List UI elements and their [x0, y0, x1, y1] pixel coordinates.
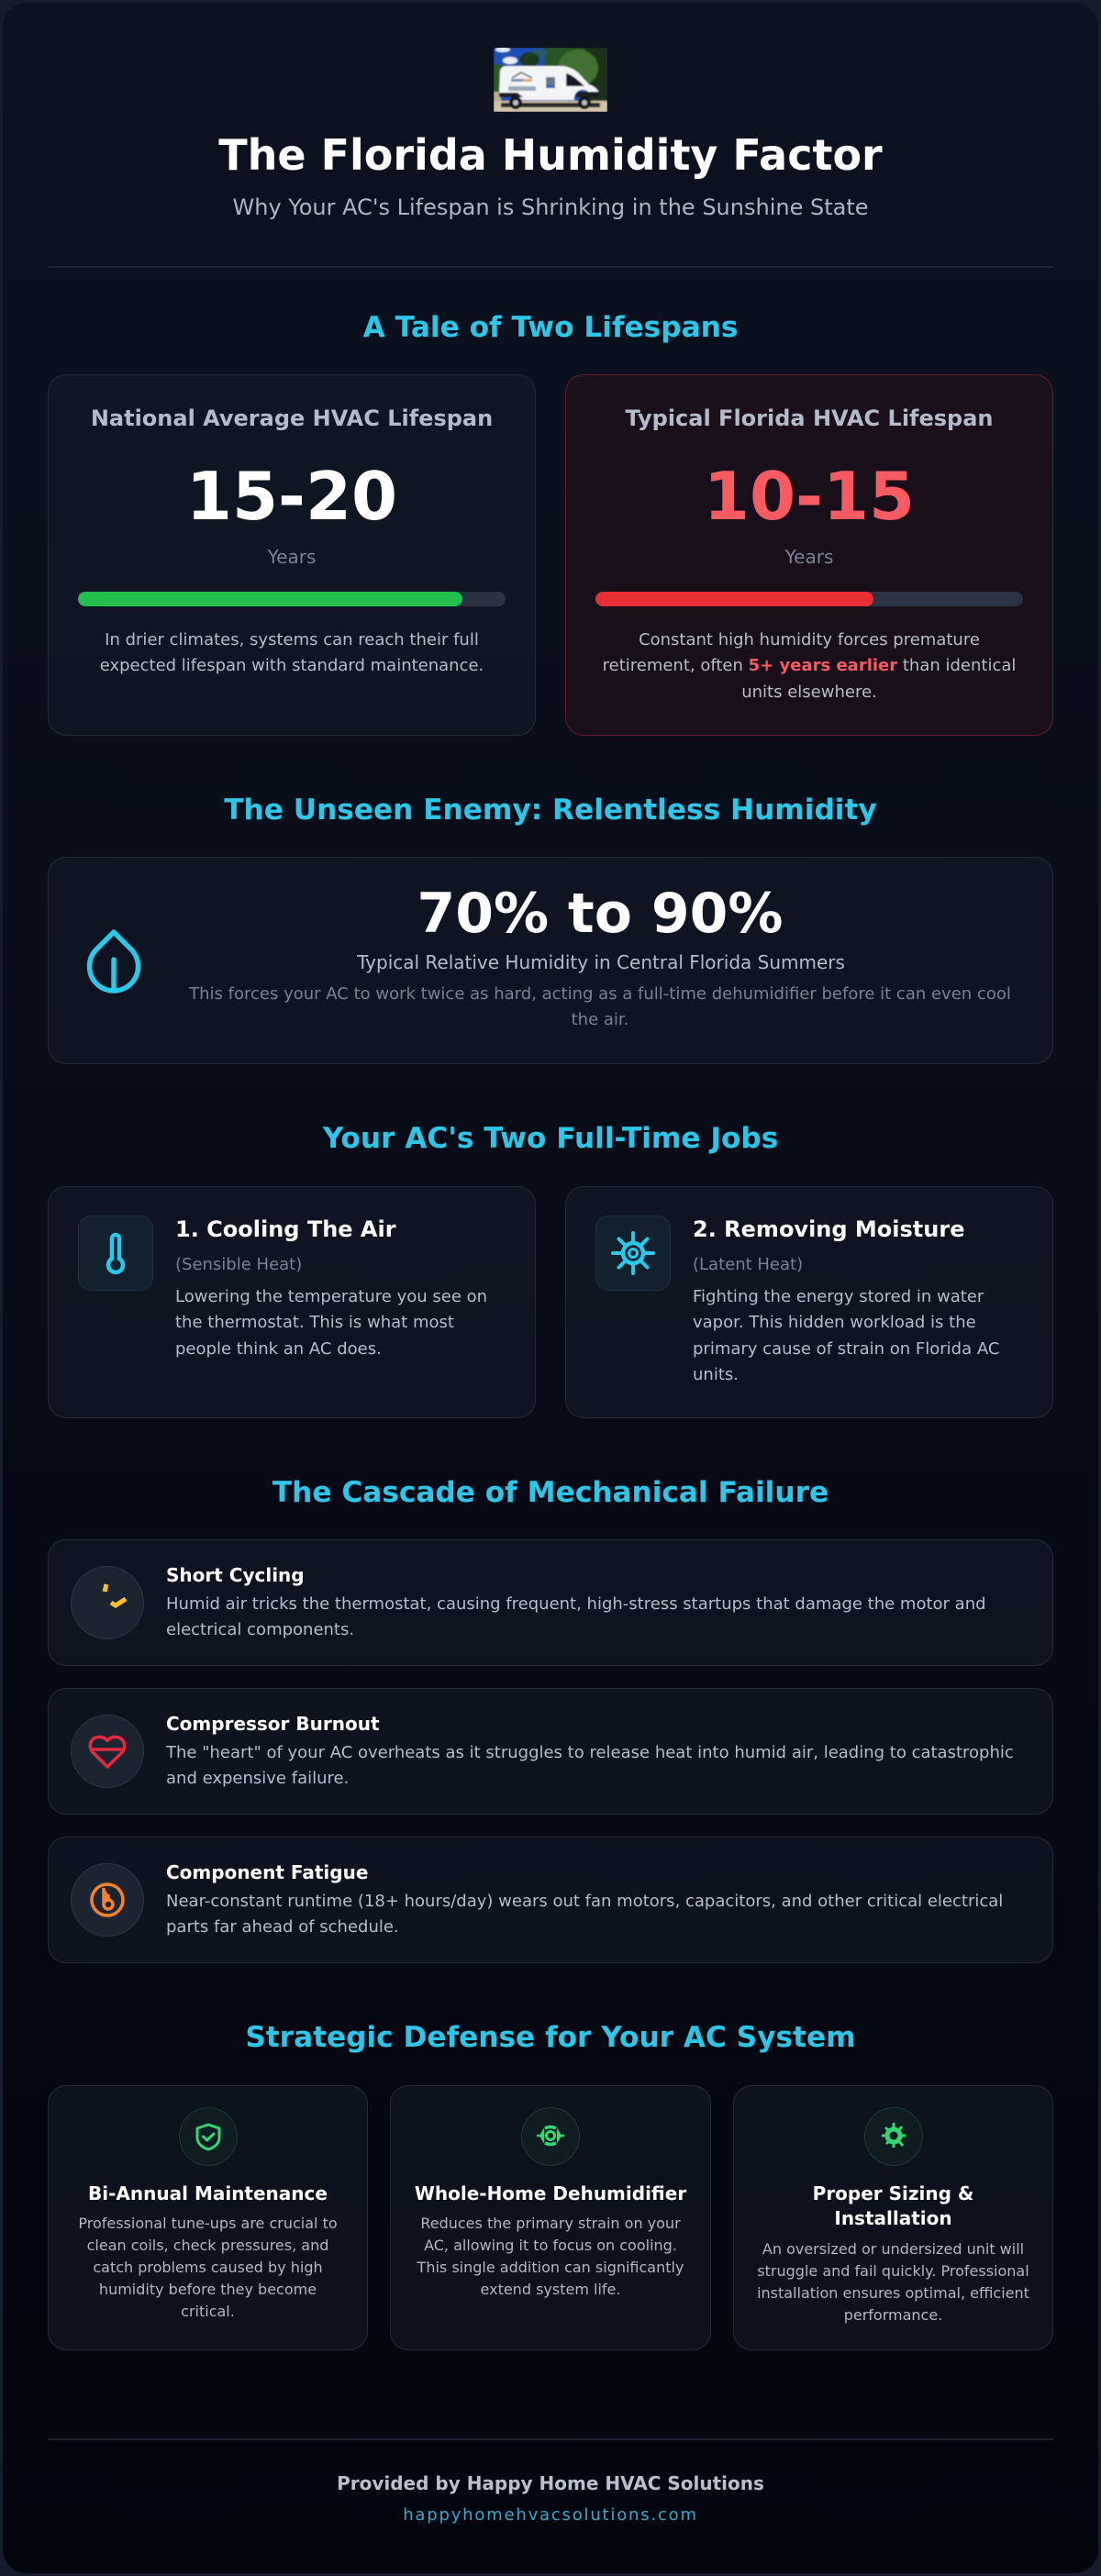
panel: humidity [48, 857, 1053, 1064]
section: Strategic Defense [48, 2021, 1053, 2350]
stat: 15-20: 15-20 [186, 458, 397, 535]
card title: Installation [834, 2207, 952, 2229]
description: primary cause of strain on Florida AC [693, 1339, 999, 1359]
provider credit: Provided by Happy Home HVAC Solutions [337, 2472, 764, 2494]
description [189, 984, 1011, 1029]
description: This forces your AC to work twice as hard, acting as a full-time dehumidifier before it can even cool [189, 984, 1011, 1004]
job subtitle: (Sensible Heat) [175, 1255, 302, 1274]
description: AC, allowing it to focus on cooling. [424, 2237, 677, 2254]
description: catch problems caused by high [93, 2259, 323, 2276]
heading: Your AC's Two Full-Time Jobs [323, 1122, 778, 1155]
description: the thermostat. This is what most [175, 1313, 454, 1332]
icon: thermometer [78, 1216, 153, 1291]
description: and expensive failure. [166, 1769, 349, 1788]
description: retirement, often 5+ years earlier than identical [603, 656, 1016, 675]
card title: Whole-Home Dehumidifier [415, 2182, 686, 2204]
item title: Component Fatigue [166, 1861, 368, 1883]
description: Humid air tricks the thermostat, causing frequent, high-stress startups that damage the motor and [166, 1594, 986, 1614]
panel heading: National Average HVAC Lifespan [91, 405, 493, 431]
divider [48, 266, 1053, 268]
card title [813, 2182, 973, 2229]
stat unit: Years [268, 546, 316, 568]
stat: 70% to 90%: 70% to 90% [417, 882, 783, 946]
panel: Florida [565, 374, 1053, 736]
job title: 1. Cooling The Air [175, 1216, 396, 1242]
panel: maintenance [48, 2085, 368, 2350]
description: Constant high humidity forces premature [639, 630, 980, 650]
subtitle: Why Your AC's Lifespan is Shrinking in the Sunshine State [233, 194, 868, 220]
description: struggle and fail quickly. Professional [757, 2262, 1029, 2280]
item title: Short Cycling [166, 1564, 305, 1586]
card title: Bi-Annual Maintenance [88, 2182, 328, 2204]
description [165, 1743, 1014, 1788]
description: people think an AC does. [175, 1339, 382, 1359]
footer [337, 2472, 764, 2525]
description [78, 2215, 338, 2320]
progress bar: red [595, 592, 1023, 606]
logo: service van photo [494, 48, 607, 112]
icon: water drop [86, 929, 141, 994]
panel: dehumidifier [390, 2085, 711, 2350]
description: Reduces the primary strain on your [420, 2215, 681, 2232]
description [603, 630, 1016, 702]
website: happyhomehvacsolutions.com [403, 2505, 698, 2525]
description: The "heart" of your AC overheats as it struggles to release heat into humid air, leading to catastrophic [166, 1743, 1014, 1762]
description: An oversized or undersized unit will [762, 2240, 1024, 2258]
icon: dehumidifier [521, 2107, 580, 2166]
heading: The Unseen Enemy: Relentless Humidity [224, 794, 877, 827]
icon: shield [178, 2107, 237, 2166]
header [218, 48, 883, 220]
section: Two Full-Time Jobs [48, 1122, 1053, 1418]
description: humidity before they become [99, 2281, 317, 2298]
description: Fighting the energy stored in water [693, 1287, 984, 1306]
icon: heart [71, 1715, 144, 1788]
description: the air. [572, 1010, 628, 1029]
description: vapor. This hidden workload is the [693, 1313, 976, 1332]
description: units elsewhere. [741, 683, 877, 702]
panel: national average [48, 374, 536, 736]
job title: 2. Removing Moisture [693, 1216, 964, 1242]
description: installation ensures optimal, efficient [757, 2284, 1029, 2302]
icon: sun gear [595, 1216, 671, 1291]
description [100, 630, 484, 675]
icon: gauge [71, 1863, 144, 1937]
job subtitle: (Latent Heat) [693, 1255, 803, 1274]
icon: sizing gear [864, 2107, 923, 2166]
stat unit: Years [785, 546, 833, 568]
description: expected lifespan with standard maintenance. [100, 656, 484, 675]
panel heading: Typical Florida HVAC Lifespan [625, 405, 994, 431]
heading: The Cascade of Mechanical Failure [272, 1476, 829, 1509]
description: critical. [181, 2303, 235, 2320]
description: Professional tune-ups are crucial to [78, 2215, 338, 2232]
description [417, 2215, 684, 2298]
section: Cascade of Mechanical Failure [48, 1476, 1053, 1963]
description [175, 1287, 487, 1359]
stat caption: Typical Relative Humidity in Central Florida Summers [357, 951, 845, 973]
section: The Unseen Enemy [48, 794, 1053, 1064]
description: parts far ahead of schedule. [166, 1917, 399, 1937]
description: units. [693, 1365, 739, 1384]
description: electrical components. [166, 1620, 354, 1639]
heading: A Tale of Two Lifespans [363, 311, 738, 344]
panel: sizing [733, 2085, 1053, 2350]
description: Lowering the temperature you see on [175, 1287, 487, 1306]
description: In drier climates, systems can reach their full [105, 630, 479, 650]
stat: 10-15: 10-15 [704, 458, 915, 535]
section: A Tale of Two Lifespans [48, 311, 1053, 736]
description [166, 1594, 986, 1639]
description: clean coils, check pressures, and [87, 2237, 328, 2254]
icon: broken clock [71, 1566, 144, 1639]
description [693, 1287, 999, 1384]
panel: moisture [565, 1186, 1053, 1418]
description: Near-constant runtime (18+ hours/day) wears out fan motors, capacitors, and other critical electrical [166, 1892, 1003, 1911]
title: The Florida Humidity Factor [218, 130, 883, 180]
heading: Strategic Defense for Your AC System [245, 2021, 856, 2054]
description: This single addition can significantly [417, 2259, 684, 2276]
card title: Proper Sizing & [813, 2182, 973, 2204]
panel: short cycling [48, 1539, 1053, 1666]
description: performance. [844, 2306, 942, 2324]
item title: Compressor Burnout [166, 1713, 380, 1735]
panel: cooling [48, 1186, 536, 1418]
progress bar: green [78, 592, 506, 606]
panel: component fatigue [48, 1837, 1053, 1963]
description [757, 2240, 1029, 2324]
description [166, 1892, 1003, 1937]
description: extend system life. [481, 2281, 620, 2298]
divider [48, 2438, 1053, 2440]
panel: compressor burnout [48, 1688, 1053, 1815]
